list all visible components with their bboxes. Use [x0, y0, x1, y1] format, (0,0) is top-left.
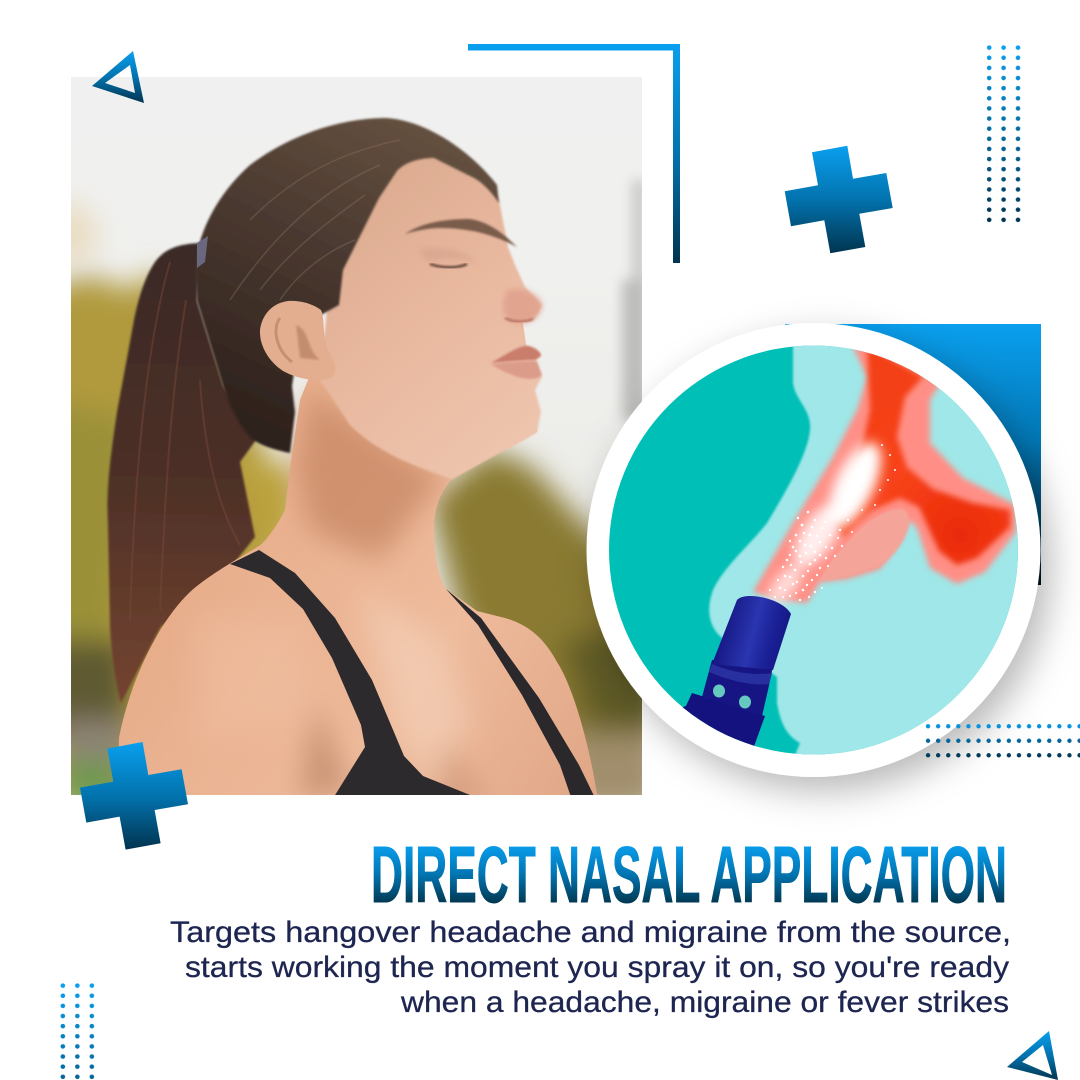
black sports top: [230, 550, 596, 800]
pink nasal passage: [753, 340, 1016, 603]
photo background: [40, 77, 660, 810]
face: [320, 150, 542, 479]
dotted pattern top right: [986, 45, 1021, 222]
hair highlights: [230, 140, 400, 300]
ponytail strands: [130, 262, 240, 620]
light nasal cavity area: [709, 340, 1030, 760]
white circle ring: [586, 323, 1040, 777]
eye and eyebrow: [405, 219, 517, 267]
nose and lips: [491, 289, 542, 379]
circle: nasal spray illustration: [586, 323, 1040, 777]
teal background: [600, 340, 1030, 760]
blue gradient square: [785, 324, 1041, 585]
spray particles: [769, 444, 896, 601]
triangle icon bottom right: [1007, 1031, 1058, 1080]
nasal spray bottle: [682, 596, 791, 746]
plus icon bottom left: [80, 742, 188, 850]
ponytail: [107, 243, 256, 703]
neck and jaw shading: [214, 382, 478, 795]
plus icon top right: [785, 146, 893, 253]
dotted pattern right of circle: [926, 724, 1080, 758]
body text: starts working the moment you spray it on, so you're ready: [185, 951, 1009, 984]
pale lower tissue: [818, 509, 909, 582]
hair: [195, 118, 499, 453]
torso and neck skin: [118, 300, 610, 800]
body text: [170, 916, 1011, 1019]
body text: Targets hangover headache and migraine from the source,: [170, 916, 1011, 949]
red inflamed core: [833, 345, 1010, 565]
scrunchie: [197, 236, 208, 268]
white mist cloud: [762, 435, 892, 611]
ear: [260, 301, 335, 380]
corner frame top right of photo: [468, 44, 680, 263]
triangle icon top left: [92, 51, 144, 103]
photo: woman breathing with eyes closed: [40, 77, 660, 810]
dotted pattern bottom left: [60, 983, 94, 1080]
body text: when a headache, migraine or fever strikes: [400, 986, 1009, 1019]
